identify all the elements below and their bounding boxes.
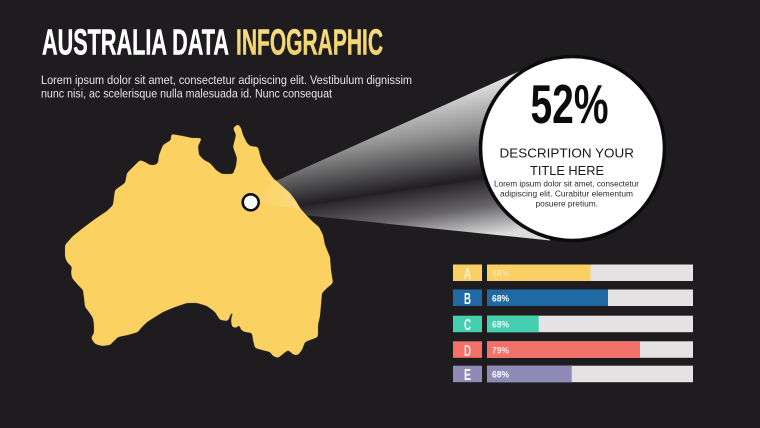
- bar C: C: [464, 317, 471, 334]
- location marker: [243, 194, 259, 210]
- title: AUSTRALIA DATA: [42, 22, 229, 62]
- intro text: Lorem ipsum dolor sit amet, consectetur adipiscing elit. Vestibulum dignissim: [41, 73, 412, 87]
- callout text: [494, 178, 639, 208]
- beam glow over map: [251, 180, 301, 209]
- spotlight beam: [270, 66, 550, 240]
- bar B: 68%: [492, 294, 509, 304]
- callout circle: [480, 56, 664, 240]
- map of Australia: [65, 124, 333, 358]
- bar D: 79%: [492, 345, 509, 355]
- bar A: A: [464, 266, 472, 283]
- callout heading: [500, 146, 634, 178]
- bar A: 68%: [492, 268, 509, 278]
- bar C: [453, 316, 693, 334]
- big percentage: 52%: [530, 73, 608, 135]
- title: INFOGRAPHIC: [236, 22, 383, 62]
- intro text: nunc nisi, ac scelerisque nulla malesuada id. Nunc consequat: [41, 86, 332, 100]
- bar B: B: [464, 291, 471, 308]
- callout heading: DESCRIPTION YOUR: [500, 146, 634, 161]
- callout heading: TITLE HERE: [530, 163, 604, 178]
- bar D: [453, 341, 693, 360]
- bar B: [453, 290, 693, 308]
- bar chart: [453, 264, 693, 384]
- bar A: [453, 264, 693, 283]
- callout text: Lorem ipsum dolor sit amet, consectetur: [494, 178, 639, 188]
- bar E: 68%: [492, 370, 509, 380]
- callout text: adipiscing elit. Curabitur elementum: [500, 188, 633, 198]
- callout text: posuere pretium.: [536, 198, 598, 208]
- bar E: [453, 366, 693, 384]
- bar E: E: [464, 367, 471, 384]
- bar C: 68%: [492, 320, 509, 330]
- bar D: D: [464, 343, 471, 360]
- intro text: [41, 73, 412, 100]
